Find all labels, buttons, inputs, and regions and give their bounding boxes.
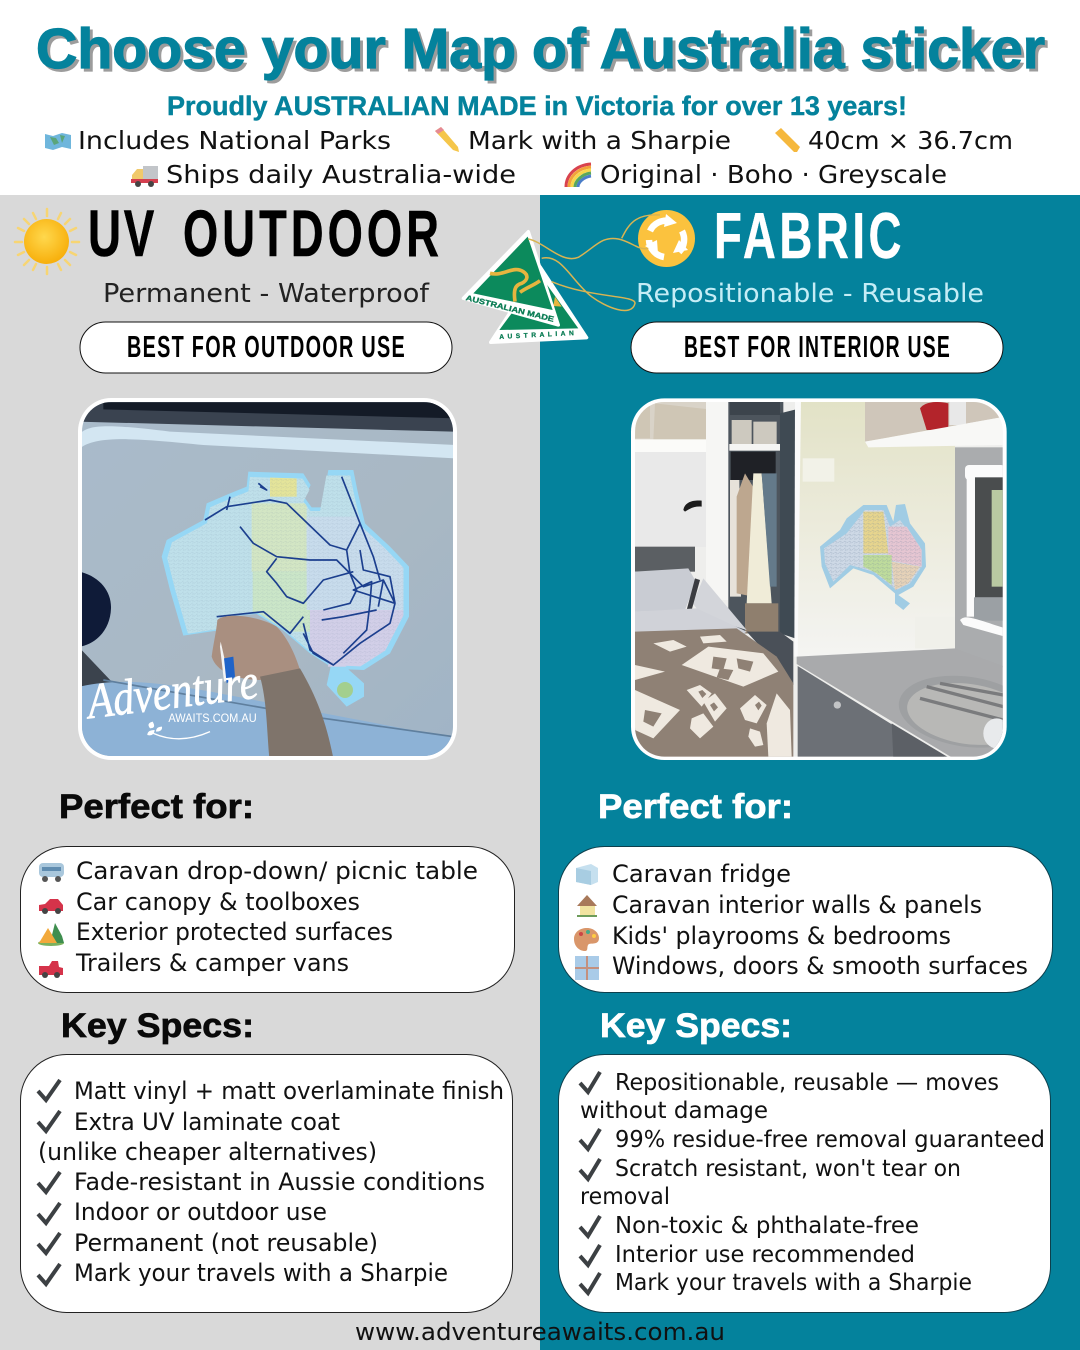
front tag [463,232,558,325]
icon: Australian Made logo with strings [463,215,660,342]
icon: map [45,133,71,150]
panel: key specs fabric: without damage [580,1098,768,1124]
power socket [915,617,955,648]
tagline: repositionable: Repositionable - Reusable [636,279,984,309]
panel: perfect for fabric list: Caravan interior walls & panels [612,891,982,919]
icon: window [575,956,599,980]
front tag: AUSTRALIAN MADE [465,293,555,324]
photo: caravan with outdoor map sticker [78,398,457,760]
dark cap [80,572,111,647]
panel: key specs outdoor: Fade-resistant in Aussie conditions [74,1168,485,1196]
tagline: permanent: Permanent - Waterproof [103,279,430,309]
checkmarks [580,1072,600,1293]
bench top [797,648,1005,758]
panel: perfect for fabric list: Kids' playrooms & bedrooms [612,922,951,950]
panel: key specs fabric: Non-toxic & phthalate-free [615,1213,919,1239]
icon: house [577,895,597,917]
lower body [82,650,112,686]
strings [528,215,660,310]
panel: key specs fabric: removal [580,1184,670,1210]
title: Choose your Map of Australia sticker [36,17,1045,81]
duvet pattern [635,635,792,757]
watermark: AWAITS.COM.AU [168,711,257,725]
panel: key specs fabric: 99% residue-free removal guaranteed [615,1127,1045,1153]
title: Choose your Map of Australia sticker [39,20,1048,84]
panel: fabric background [540,195,1080,1350]
heading: FABRIC: FABRIC [714,199,905,272]
panel: key specs fabric: Scratch resistant, won't tear on [615,1156,961,1182]
subtitle: Proudly AUSTRALIAN MADE in Victoria for over 13 years! [167,91,907,121]
checkmarks [38,1080,60,1284]
icon: caravan [39,863,64,882]
panel: perfect for outdoor list: Exterior protected surfaces [76,918,393,946]
headboard [633,547,695,572]
hand and arm [212,616,333,758]
pill: best for outdoor use: BEST FOR OUTDOOR USE [127,329,406,364]
heading: perfect for (fabric): Perfect for: [598,788,793,826]
feature: sharpie: Mark with a Sharpie [468,126,731,155]
light switch [803,458,834,482]
back tag [491,267,587,342]
panel: key specs outdoor: Indoor or outdoor use [74,1198,327,1226]
overhead shelf [635,402,706,440]
website address: www.adventureawaits.com.au [355,1318,725,1346]
photo: caravan interior with fabric map sticker [631,398,1039,760]
heading: UV OUTDOOR: OUTDOOR [183,196,443,270]
window wall [955,447,1005,667]
wardrobe [728,400,783,633]
watermark: Adventure [81,653,261,730]
back tag: AUSTRALIAN [499,330,577,341]
upper cupboard [865,400,1005,442]
icon: ice cube [576,864,598,885]
icon: camping tent [38,923,64,946]
frame highlight [80,426,455,458]
icon: truck [131,166,158,187]
feature: shipping: Ships daily Australia-wide [166,160,516,189]
panel: key specs fabric: Mark your travels with a Sharpie [615,1270,972,1296]
white header background [0,0,1080,195]
panel: key specs outdoor: Matt vinyl + matt overlaminate finish [74,1077,504,1105]
feature: designs: Original · Boho · Greyscale [600,160,947,189]
panel: perfect for outdoor list [20,846,514,992]
panel: key specs outdoor: Permanent (not reusable) [74,1229,378,1257]
right wall [797,400,955,657]
panel: perfect for fabric list [558,846,1052,992]
cabinets [798,666,947,758]
heading: key specs (outdoor): Key Specs: [61,1007,254,1045]
panel: perfect for fabric list: Caravan fridge [612,860,791,888]
bed [635,608,746,634]
panel: perfect for fabric list: Windows, doors & smooth surfaces [612,952,1028,980]
reading lamp [683,501,702,512]
wardrobe door [780,410,795,638]
panel: perfect for outdoor list: Trailers & camper vans [75,949,349,977]
feature: size: 40cm × 36.7cm [808,126,1013,155]
panel: key specs outdoor: (unlike cheaper alternatives) [38,1138,377,1166]
icon: recycle badge [638,210,695,267]
heading: UV OUTDOOR: UV [88,196,157,270]
heading: UV OUTDOOR [88,196,443,270]
sink [899,676,1003,748]
watermark [86,674,258,740]
panel: key specs outdoor: Extra UV laminate coat [74,1108,340,1136]
icon: rainbow [566,164,591,187]
panel: key specs fabric: Repositionable, reusable — moves [615,1070,999,1096]
icon: pickup truck [39,961,63,978]
icon: car [39,899,63,914]
Australia map sticker [153,463,420,707]
icon: pencil [435,127,459,152]
panel: key specs outdoor: Mark your travels with a Sharpie [74,1259,448,1287]
feature: national parks: Includes National Parks [78,126,391,155]
panel: key specs fabric: Interior use recommended [615,1242,915,1268]
window seal, top [80,400,455,432]
icon: sun [15,209,79,274]
panel: perfect for outdoor list: Caravan drop-down/ picnic table [76,857,478,885]
panel: key specs fabric [558,1054,1050,1312]
icon: palette [574,928,599,951]
pill: best for outdoor use [80,322,452,373]
panel: key specs outdoor [20,1054,512,1312]
panel: UV outdoor background [0,195,540,1350]
icon: ruler [775,128,800,152]
panel: perfect for outdoor list: Car canopy & toolboxes [76,888,360,916]
heading: key specs (fabric): Key Specs: [600,1007,792,1045]
heading: perfect for (outdoor): Perfect for: [59,788,254,826]
pillows [633,568,696,612]
pill: best for interior use [631,322,1003,373]
fabric map sticker [820,504,926,610]
